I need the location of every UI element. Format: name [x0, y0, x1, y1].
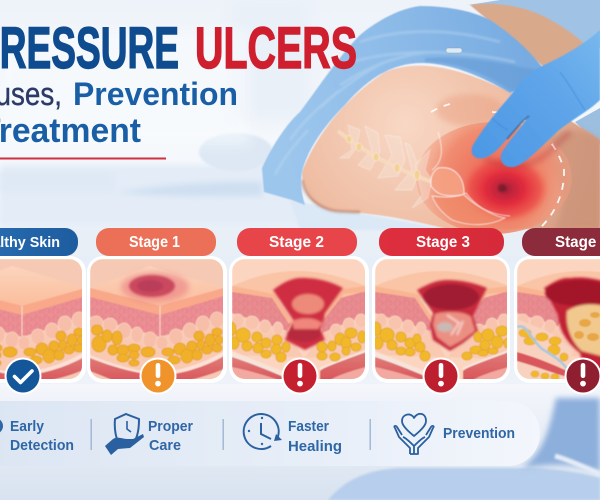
icon: heart in hands	[394, 414, 434, 454]
pill: stage 4	[522, 228, 600, 256]
status badges	[4, 358, 600, 394]
pill: stage 3	[379, 228, 504, 256]
badge: stage 3 warning	[422, 358, 460, 394]
card: stage 4	[514, 256, 600, 383]
item: faster healing	[244, 414, 342, 455]
card: stage 3	[371, 256, 510, 383]
blanket: bottom right	[328, 468, 600, 500]
item: faster healing: Healing	[288, 438, 342, 455]
pill: stage 1: Stage 1	[129, 234, 180, 251]
shirt button	[446, 48, 462, 53]
card: stage 1	[87, 256, 227, 383]
item: early detection: Early	[10, 418, 45, 435]
redness halo	[416, 122, 572, 234]
sheet under the hip	[290, 200, 450, 230]
card: stage 2	[226, 256, 369, 383]
wound	[461, 155, 549, 223]
dashed marker ring	[431, 104, 564, 228]
title glow	[0, 30, 250, 145]
benefits bar	[0, 401, 540, 466]
badge: stage 1 warning	[140, 358, 176, 394]
title	[0, 16, 357, 160]
photo: patient hip with gloved hand	[262, 0, 600, 234]
badge: stage 2 warning	[282, 358, 318, 394]
icon: early detection	[0, 418, 3, 434]
pill: healthy skin	[0, 228, 78, 256]
finger shadow	[484, 132, 570, 166]
hip skin	[302, 66, 600, 229]
badge: stage 4 warning	[564, 358, 600, 394]
title: ulcers: ULCERS	[195, 16, 357, 81]
icon: shield and hand	[105, 414, 144, 455]
stage pills	[0, 228, 600, 256]
item: faster healing: Faster	[288, 418, 329, 435]
spine illustration	[338, 125, 510, 225]
pill: stage 3: Stage 3	[416, 234, 470, 251]
pill: stage 2	[237, 228, 357, 256]
item: early detection	[0, 418, 74, 454]
icon: clock	[244, 414, 282, 449]
item: prevention	[394, 414, 515, 454]
item: early detection: Detection	[10, 437, 74, 454]
title underline	[0, 158, 166, 160]
item: proper care: Proper	[148, 418, 193, 435]
pill: stage 2: Stage 2	[269, 234, 324, 251]
upper back skin	[470, 4, 586, 68]
shirt	[262, 6, 543, 205]
badge: healthy check	[4, 358, 42, 394]
subtitle: prevention: Prevention	[73, 76, 238, 112]
pill: stage 1	[96, 228, 216, 256]
item: proper care	[105, 414, 193, 455]
right shirt	[468, 0, 600, 48]
item: proper care: Care	[149, 437, 181, 454]
glove	[472, 30, 600, 167]
card: healthy skin	[0, 256, 86, 383]
item: prevention: Prevention	[443, 425, 515, 442]
bar background	[0, 401, 540, 466]
